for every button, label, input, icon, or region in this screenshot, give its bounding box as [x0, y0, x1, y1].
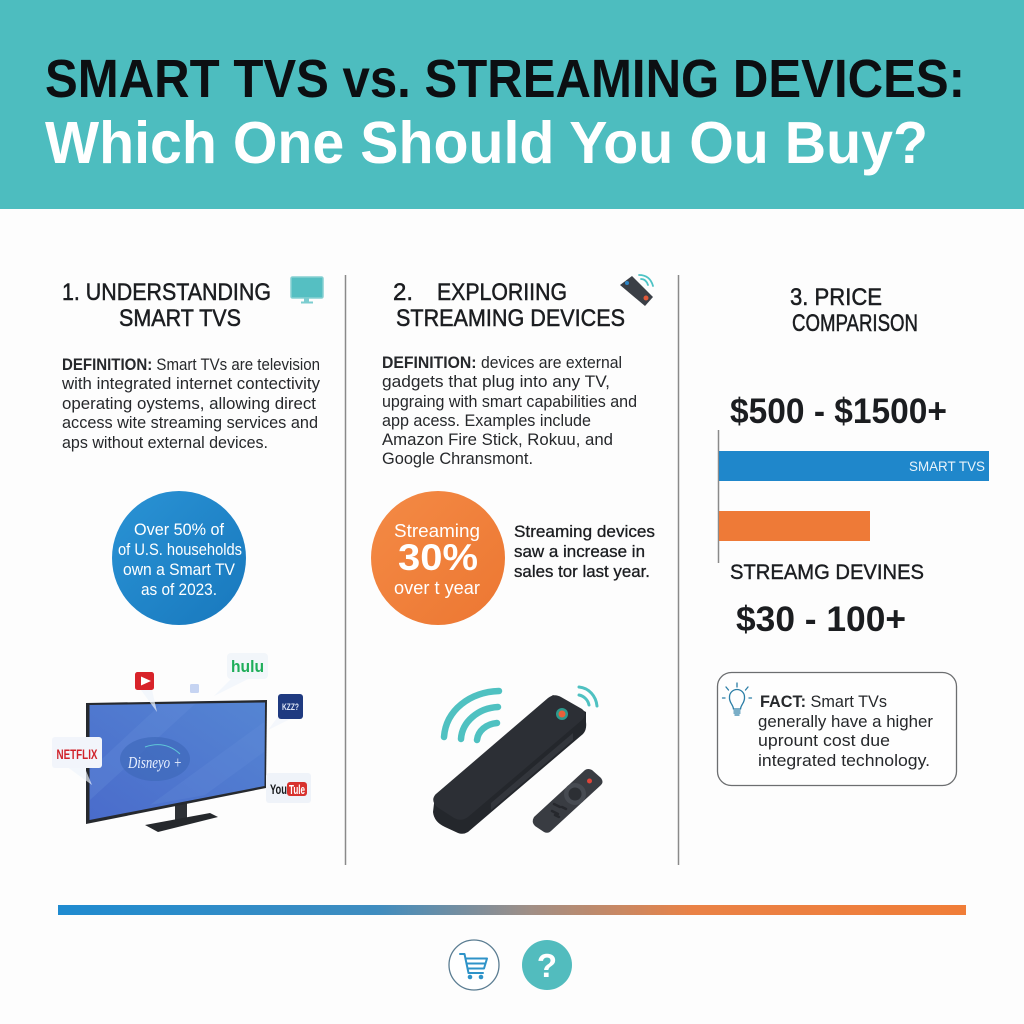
tv screen [86, 700, 267, 824]
fact text [758, 693, 934, 770]
streaming stick [433, 695, 586, 834]
icon: light bulb [722, 683, 752, 715]
stat circle: streaming growth: over t year [394, 578, 480, 598]
heading 2: 2. [393, 279, 413, 306]
stat circle: smart tv households [112, 491, 246, 625]
column divider left [344, 275, 346, 865]
icon: shopping cart [449, 940, 499, 990]
definition text [382, 354, 637, 468]
app bubble: netflix: NETFLIX [56, 746, 98, 762]
tv stand [145, 803, 218, 832]
definition text: Amazon Fire Stick, Rokuu, and [382, 431, 613, 449]
app icon: red play [135, 672, 157, 712]
stat caption: sales tor last year. [514, 563, 650, 581]
fact text: integrated technology. [758, 752, 930, 770]
bar: smart tvs: SMART TVS [909, 458, 985, 474]
bar: smart tvs [719, 451, 989, 481]
streaming price: $30 - 100+ [736, 600, 906, 639]
definition text: operating oystems, allowing direct [62, 395, 316, 413]
heading 3: 3. PRICE [790, 284, 882, 311]
panel: understanding smart tvs [52, 277, 323, 832]
heading 2: EXPLORIING [437, 279, 567, 306]
column divider right [678, 275, 680, 865]
definition text: Google Chransmont. [382, 450, 533, 468]
panel: price comparison [718, 284, 989, 786]
definition text: upgraing with smart capabilities and [382, 393, 637, 411]
definition text [61, 356, 321, 452]
heading 1 [62, 279, 271, 332]
stat circle: smart tv households: Over 50% of [134, 521, 224, 539]
definition text: DEFINITION: Smart TVs are television [62, 356, 320, 374]
callout: fact box [718, 672, 956, 786]
definition text: gadgets that plug into any TV, [382, 373, 610, 391]
panel: exploring streaming devices [371, 275, 655, 834]
stat caption: saw a increase in [514, 543, 645, 561]
streaming bar label: STREAMG DEVINES [730, 561, 924, 584]
heading 1: 1. UNDERSTANDING [62, 279, 271, 306]
stat circle: smart tv households: of U.S. households [118, 541, 242, 559]
app bubble: hulu [214, 653, 268, 696]
stat caption: Streaming devices [514, 523, 655, 541]
illustration: smart tv with streaming apps [52, 653, 311, 832]
definition text: with integrated internet contectivity [61, 375, 321, 393]
wifi arcs small [579, 687, 597, 706]
heading 1: SMART TVS [119, 305, 241, 332]
title line 2: Which One Should You Ou Buy? [45, 110, 928, 176]
wifi arcs large [444, 691, 499, 740]
definition text: app acess. Examples include [382, 412, 591, 430]
illustration: streaming stick and remote [433, 687, 602, 834]
bar chart [718, 430, 989, 563]
app icon: dark blue tile: KZZ? [282, 702, 299, 712]
icon: question mark: ? [537, 947, 557, 984]
fact text: uprount cost due [758, 732, 890, 750]
fact text: generally have a higher [758, 713, 934, 731]
definition text: DEFINITION: devices are external [382, 354, 622, 372]
stat circle: streaming growth [371, 491, 505, 625]
gradient divider bar [58, 905, 966, 915]
stat circle: smart tv households: own a Smart TV [123, 561, 235, 579]
app icon: small tile [190, 684, 199, 693]
stat caption [514, 523, 655, 581]
definition text: aps without external devices. [62, 434, 268, 452]
heading 2: STREAMING DEVICES [396, 305, 625, 332]
heading 3 [790, 284, 918, 337]
stat circle: streaming growth: Streaming [394, 521, 480, 541]
app bubble: hulu: hulu [231, 657, 264, 676]
bar: streaming devices [719, 511, 870, 541]
app bubble: youtube [266, 773, 311, 803]
remote control [533, 769, 602, 833]
app bubble: netflix [52, 737, 102, 785]
stat circle: smart tv households: as of 2023. [141, 581, 217, 599]
tv screen: Disneyo + [127, 753, 182, 772]
stat circle: streaming growth: 30% [398, 537, 478, 578]
icon: question mark [522, 940, 572, 990]
icon: small monitor [291, 277, 323, 304]
heading 3: COMPARISON [792, 310, 918, 337]
app bubble: youtube: You [270, 781, 287, 797]
icon: small remote [620, 275, 653, 306]
app bubble: youtube: Tule [289, 782, 305, 797]
header banner [0, 0, 1024, 209]
heading 2 [393, 279, 625, 332]
smart tv price: $500 - $1500+ [730, 392, 947, 431]
fact text: FACT: Smart TVs [760, 693, 887, 711]
app icon: dark blue tile [268, 694, 303, 730]
definition text: access wite streaming services and [62, 414, 318, 432]
